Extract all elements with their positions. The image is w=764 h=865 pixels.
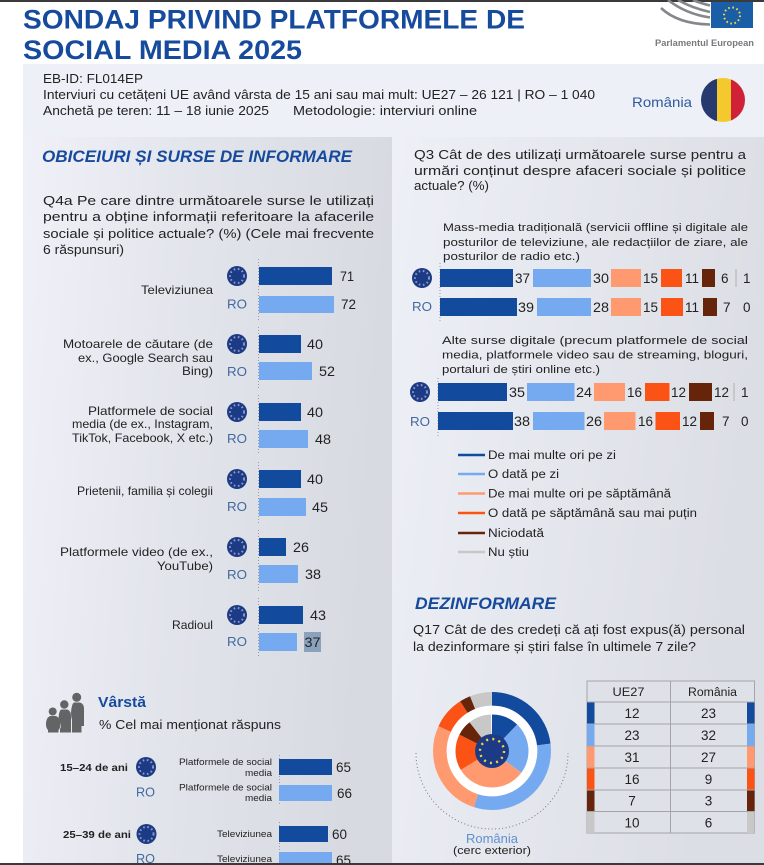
heading: age: Vârstă xyxy=(98,694,147,711)
icon: Romanian flag xyxy=(701,78,746,122)
row: video platforms xyxy=(60,537,321,583)
row: friends and family xyxy=(77,469,328,516)
table: EU27 vs Romania: 23 xyxy=(624,728,640,743)
table: EU27 vs Romania: 27 xyxy=(701,750,716,765)
table: EU27 vs Romania: 7 xyxy=(628,794,636,808)
chart: age 15-24: 15–24 de ani xyxy=(60,762,128,774)
chart: age 15-24 xyxy=(60,755,352,806)
legend xyxy=(458,450,697,559)
row: radio xyxy=(172,605,326,652)
row: social media platforms: TikTok, Facebook, X etc.) xyxy=(72,431,213,445)
question Q3: urmări conținut despre afaceri sociale și politice xyxy=(414,164,746,178)
stacked bars: traditional media: 1 xyxy=(743,271,751,286)
stacked bars: other digital sources: 24 xyxy=(576,385,593,400)
heading: habits and sources: OBICEIURI ȘI SURSE DE INFORMARE xyxy=(42,148,353,166)
stacked bars: traditional media: 7 xyxy=(723,300,731,315)
row: search engines: ex., Google Search sau xyxy=(78,351,213,365)
bar chart: information sources xyxy=(60,259,356,658)
question Q17 xyxy=(413,623,745,654)
row: video platforms: Platformele video (de ex., xyxy=(60,545,213,559)
text: traditional media: posturilor de radio etc.) xyxy=(443,251,580,263)
title: SOCIAL MEDIA 2025 xyxy=(23,35,302,65)
stacked bars: other digital sources: 16 xyxy=(627,385,642,400)
question Q4a: 6 răspunsuri) xyxy=(43,243,124,257)
stacked bars: traditional media: 28 xyxy=(593,300,609,315)
question Q3 xyxy=(414,148,746,193)
chart: age 15-24: 66 xyxy=(337,786,352,801)
row: video platforms: 38 xyxy=(305,567,321,582)
row: radio: RO xyxy=(227,634,247,649)
table: EU27 vs Romania: 23 xyxy=(701,706,716,721)
question Q4a xyxy=(43,194,374,257)
bottom rule xyxy=(0,863,764,865)
stacked bars: traditional media: 11 xyxy=(685,300,699,315)
table: EU27 vs Romania: 9 xyxy=(705,772,712,787)
chart: age 15-24: Platformele de social xyxy=(179,782,272,792)
row: video platforms: YouTube) xyxy=(157,559,213,573)
row: television: RO xyxy=(227,296,247,312)
text: traditional media: posturilor de televiziune, ale redacțiilor de ziare, ale xyxy=(443,237,748,249)
question Q17: la dezinformare și știri false în ultimele 7 zile? xyxy=(413,640,696,654)
stacked bars: traditional media: 15 xyxy=(643,300,658,315)
stacked bars: other digital sources: 12 xyxy=(714,385,729,400)
panel: survey details: Interviuri cu cetățeni UE având vârsta de 15 ani sau mai mult: UE27 – 26 121 | RO – 1 040 xyxy=(43,87,595,102)
table: EU27 vs Romania: 32 xyxy=(701,728,716,743)
legend: De mai multe ori pe zi xyxy=(488,450,616,462)
question Q3: actuale? (%) xyxy=(414,179,489,193)
chart: age 25-39: Televiziunea xyxy=(217,829,273,839)
title: SONDAJ PRIVIND PLATFORMELE DE xyxy=(23,4,525,34)
text: other digital sources: media, platformele video sau de streaming, bloguri, xyxy=(442,350,748,362)
table: EU27 vs Romania: UE27 xyxy=(612,687,644,699)
heading: disinformation: DEZINFORMARE xyxy=(415,595,557,613)
text: other digital sources: portaluri de știri online etc.) xyxy=(442,364,600,376)
donut caption xyxy=(453,832,531,857)
panel: survey details xyxy=(23,64,764,137)
row: television xyxy=(141,266,356,313)
stacked bars: traditional media: 39 xyxy=(518,300,534,315)
row: friends and family: RO xyxy=(227,499,247,514)
row: search engines: Bing) xyxy=(182,364,213,378)
chart: age 15-24: 65 xyxy=(336,760,351,775)
donut caption: (cerc exterior) xyxy=(453,845,531,857)
stacked bars: traditional media: 6 xyxy=(721,271,729,286)
question Q3: Q3 Cât de des utilizați următoarele surse pentru a xyxy=(414,148,746,162)
stacked bars: other digital sources: 1 xyxy=(741,385,749,400)
chart: age 15-24: media xyxy=(245,768,273,778)
row: television: 71 xyxy=(340,269,354,284)
stacked bars: other digital sources: 0 xyxy=(741,414,749,429)
legend: De mai multe ori pe săptămână xyxy=(488,488,672,500)
legend: O dată pe zi xyxy=(488,469,559,481)
chart: age 25-39: Televiziunea xyxy=(217,854,273,864)
panel: survey details: Metodologie: interviuri online xyxy=(293,103,477,118)
stacked bars: traditional media xyxy=(412,263,751,322)
stacked bars: other digital sources xyxy=(410,378,749,437)
text: traditional media xyxy=(443,222,748,263)
text: traditional media: Mass-media tradițională (servicii offline și digitale ale xyxy=(443,222,748,234)
row: search engines xyxy=(63,334,335,380)
row: friends and family: 40 xyxy=(307,472,323,487)
text: other digital sources xyxy=(442,335,748,376)
stacked bars: traditional media: 11 xyxy=(685,271,699,286)
table: EU27 vs Romania: 12 xyxy=(624,706,640,721)
stacked bars: other digital sources: 12 xyxy=(671,385,686,400)
panel: survey details: Anchetă pe teren: 11 – 18 iunie 2025 xyxy=(43,103,269,118)
logo: European Parliament: Parlamentul European xyxy=(655,38,754,49)
heading: age: % Cel mai menționat răspuns xyxy=(99,718,281,732)
row: search engines: Motoarele de căutare (de xyxy=(63,337,213,351)
chart: age 25-39: 25–39 de ani xyxy=(63,829,131,841)
table: EU27 vs Romania xyxy=(587,681,754,833)
stacked bars: traditional media: 15 xyxy=(643,271,658,286)
stacked bars: other digital sources: RO xyxy=(410,414,430,429)
row: video platforms: RO xyxy=(227,567,247,582)
table: EU27 vs Romania: 3 xyxy=(705,794,712,808)
stacked bars: other digital sources: 16 xyxy=(638,414,653,429)
row: social media platforms: media (de ex., Instagram, xyxy=(72,417,213,431)
logo: European Parliament xyxy=(655,0,754,49)
stacked bars: traditional media: 30 xyxy=(593,271,609,286)
country label: România xyxy=(632,94,692,110)
chart: age 25-39 xyxy=(63,822,351,865)
text: other digital sources: Alte surse digitale (precum platformele de social xyxy=(442,335,748,347)
panel: right column xyxy=(392,137,764,863)
title xyxy=(23,4,525,65)
row: television: 72 xyxy=(341,297,356,312)
icon: age group people xyxy=(46,693,84,732)
row: search engines: RO xyxy=(227,364,247,379)
table: EU27 vs Romania: România xyxy=(688,687,738,699)
row: social media platforms xyxy=(72,402,331,448)
table: EU27 vs Romania: 6 xyxy=(705,816,712,830)
row: friends and family: Prietenii, familia și colegii xyxy=(77,484,213,498)
row: television: Televiziunea xyxy=(141,283,213,297)
legend: Nu știu xyxy=(488,547,529,559)
row: social media platforms: 40 xyxy=(307,405,323,420)
table: EU27 vs Romania: 16 xyxy=(624,772,640,787)
stacked bars: traditional media: 37 xyxy=(515,271,530,286)
question Q4a: Q4a Pe care dintre următoarele surse le utilizați xyxy=(43,194,374,208)
legend: Niciodată xyxy=(488,528,545,540)
stacked bars: other digital sources: 26 xyxy=(586,414,602,429)
chart: age 15-24: Platformele de social xyxy=(179,757,272,767)
row: radio: 43 xyxy=(310,608,326,623)
stacked bars: traditional media: RO xyxy=(412,299,432,314)
donut caption: România xyxy=(466,832,518,846)
top rule xyxy=(0,0,764,2)
stacked bars: other digital sources: 38 xyxy=(514,414,530,429)
question Q4a: sociale și politice actuale? (%) (Cele mai frecvente xyxy=(43,227,374,241)
stacked bars: traditional media: 0 xyxy=(743,300,751,315)
row: search engines: 40 xyxy=(307,337,323,352)
stacked bars: other digital sources: 35 xyxy=(509,385,525,400)
donut chart: exposure to disinformation xyxy=(416,699,568,829)
row: radio: 37 xyxy=(304,635,320,650)
row: social media platforms: RO xyxy=(227,431,247,446)
panel: survey details: EB-ID: FL014EP xyxy=(43,71,143,86)
row: social media platforms: Platformele de social xyxy=(88,404,213,418)
row: friends and family: 45 xyxy=(312,500,328,515)
stacked bars: other digital sources: 7 xyxy=(722,414,730,429)
chart: age 25-39: 60 xyxy=(332,827,347,842)
question Q4a: pentru a obține informații referitoare la afacerile xyxy=(43,210,374,224)
chart: age 15-24: RO xyxy=(136,784,155,800)
chart: age 15-24: media xyxy=(245,793,273,803)
row: social media platforms: 48 xyxy=(315,432,331,447)
heading: age xyxy=(98,694,281,732)
row: radio: Radioul xyxy=(172,618,213,632)
table: EU27 vs Romania: 10 xyxy=(624,816,640,830)
question Q17: Q17 Cât de des credeți că ați fost expus(ă) personal xyxy=(413,623,745,637)
row: search engines: 52 xyxy=(319,364,335,379)
legend: O dată pe săptămână sau mai puțin xyxy=(488,508,697,520)
stacked bars: other digital sources: 12 xyxy=(682,414,697,429)
table: EU27 vs Romania: 31 xyxy=(624,750,640,765)
row: video platforms: 26 xyxy=(293,540,309,555)
panel: habits and sources xyxy=(23,137,392,865)
